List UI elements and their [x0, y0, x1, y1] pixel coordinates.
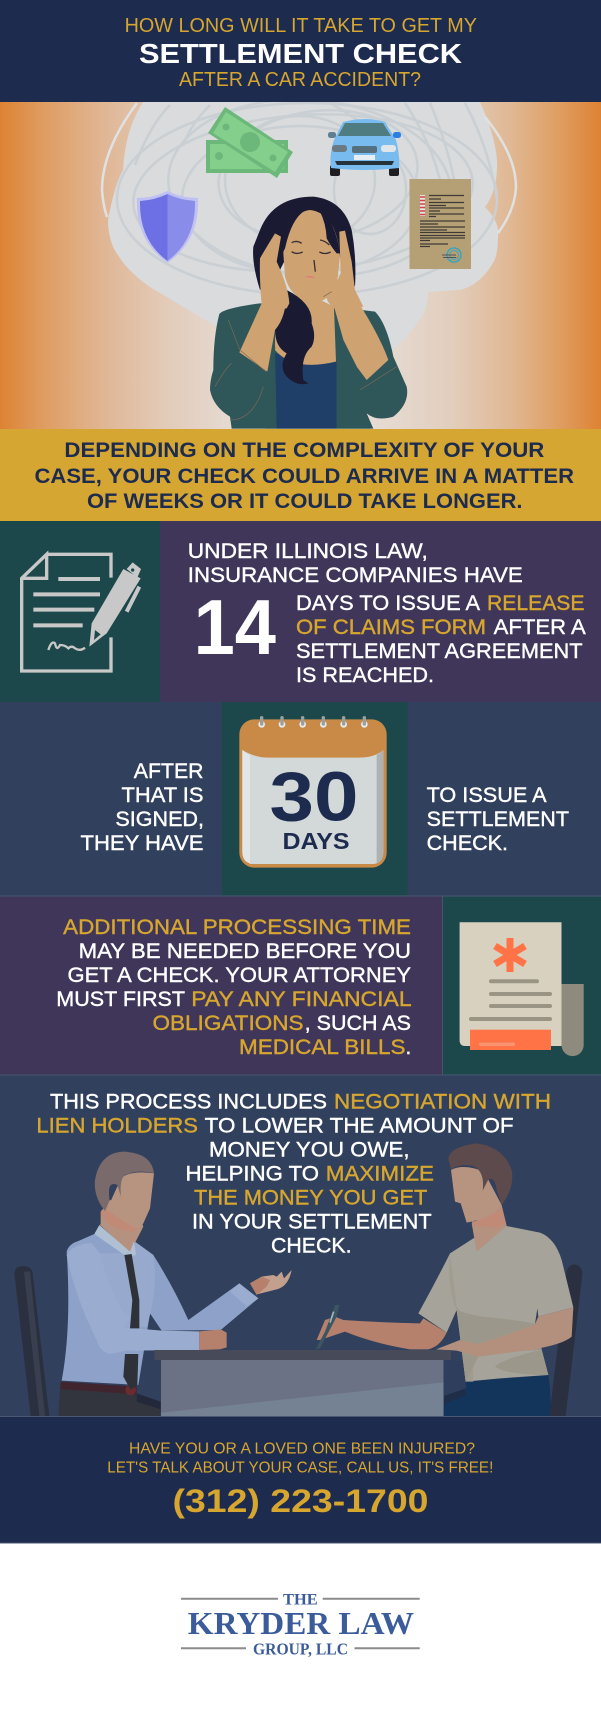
number 30: 30 [270, 758, 358, 836]
text: release of claims: IS REACHED. [296, 664, 434, 687]
text: to issue a settlement check: TO ISSUE A [427, 784, 547, 807]
panel: call to action footer [0, 1416, 601, 1543]
panel: 14 days [0, 521, 601, 702]
table [154, 1350, 451, 1416]
icon: calendar [239, 716, 387, 868]
icon: shield [137, 191, 198, 263]
text: negotiation with lien holders: MAXIMIZE [326, 1163, 434, 1186]
text: negotiation with lien holders: IN YOUR SETTLEMENT [192, 1211, 432, 1234]
summary line 1: DEPENDING ON THE COMPLEXITY OF YOUR [64, 439, 544, 462]
text: release of claims [296, 592, 586, 687]
text: release of claims: AFTER A [494, 616, 586, 639]
text: additional processing: MAY BE NEEDED BEFORE YOU [79, 940, 411, 963]
icon: blue car [328, 119, 401, 176]
logo: Kryder Law Group: GROUP, LLC [253, 1639, 348, 1658]
panel: hero illustration [0, 88, 601, 429]
call to action text: HAVE YOU OR A LOVED ONE BEEN INJURED? [129, 1440, 475, 1457]
icon: medical bill [460, 922, 584, 1056]
panel: gold summary banner [0, 429, 601, 521]
summary line 2: CASE, YOUR CHECK COULD ARRIVE IN A MATTER [34, 465, 574, 488]
icon: document [410, 179, 471, 269]
text: after that is signed [80, 760, 204, 855]
text: negotiation with lien holders [36, 1091, 551, 1258]
text: after that is signed: SIGNED, [115, 808, 204, 831]
text: negotiation with lien holders: MONEY YOU OWE, [209, 1139, 410, 1162]
panel: additional processing time [0, 896, 601, 1075]
text: to issue a settlement check: CHECK. [427, 832, 508, 855]
text: negotiation with lien holders: HELPING TO [186, 1163, 319, 1186]
title line 3: AFTER A CAR ACCIDENT? [179, 69, 421, 91]
text: additional processing: . [406, 1036, 411, 1059]
text: additional processing: ADDITIONAL PROCESSING TIME [63, 916, 411, 939]
man on right with chair [316, 1143, 582, 1416]
text: additional processing: MUST FIRST [56, 988, 185, 1011]
text: to issue a settlement check: SETTLEMENT [427, 808, 569, 831]
call to action text [107, 1440, 493, 1476]
icon: money [206, 107, 293, 178]
logo: Kryder Law Group: KRYDER LAW [188, 1605, 414, 1641]
icon: signed document and pen [22, 554, 141, 671]
text: negotiation with lien holders: CHECK. [271, 1235, 352, 1258]
man on left with chair [14, 1152, 292, 1416]
text: negotiation with lien holders: THIS PROCESS INCLUDES [50, 1091, 327, 1114]
text: negotiation with lien holders: LIEN HOLDERS [36, 1115, 198, 1138]
panel: title header [0, 0, 601, 102]
woman holding her head [210, 197, 407, 429]
panel: 30 days [0, 702, 601, 896]
text: release of claims: RELEASE [487, 592, 584, 615]
summary line 3: OF WEEKS OR IT COULD TAKE LONGER. [87, 490, 522, 513]
text: after that is signed: THAT IS [122, 784, 204, 807]
call to action text: LET'S TALK ABOUT YOUR CASE, CALL US, IT'S FREE! [107, 1459, 493, 1476]
text: negotiation with lien holders: THE MONEY YOU GET [194, 1187, 428, 1210]
text: release of claims: SETTLEMENT AGREEMENT [296, 640, 583, 663]
text: to issue a settlement check [427, 784, 569, 855]
text: after that is signed: AFTER [134, 760, 204, 783]
panel: negotiation [0, 1075, 601, 1417]
text: under Illinois law [188, 540, 523, 587]
text: additional processing: MEDICAL BILLS [239, 1036, 406, 1059]
thought cloud with scribbles [102, 88, 516, 350]
text: additional processing: , SUCH AS [305, 1012, 411, 1035]
text: negotiation with lien holders: NEGOTIATION WITH [334, 1091, 551, 1114]
text: additional processing [56, 916, 412, 1059]
text: release of claims: OF CLAIMS FORM [296, 616, 486, 639]
text: additional processing: GET A CHECK. YOUR ATTORNEY [68, 964, 411, 987]
text: under Illinois law: UNDER ILLINOIS LAW, [188, 540, 428, 563]
logo: Kryder Law Group [181, 1592, 420, 1658]
big number 14: 14 [194, 583, 276, 671]
label days: DAYS [282, 828, 350, 854]
text: release of claims: DAYS TO ISSUE A [296, 592, 480, 615]
text: after that is signed: THEY HAVE [80, 832, 204, 855]
text: under Illinois law: INSURANCE COMPANIES HAVE [188, 564, 523, 587]
text: additional processing: PAY ANY FINANCIAL [191, 988, 412, 1011]
text: additional processing: OBLIGATIONS [152, 1012, 304, 1035]
logo: Kryder Law Group: THE [283, 1592, 318, 1609]
text: negotiation with lien holders: TO LOWER THE AMOUNT OF [205, 1115, 514, 1138]
title line 1: HOW LONG WILL IT TAKE TO GET MY [125, 15, 477, 37]
title line 2: SETTLEMENT CHECK [139, 38, 462, 69]
phone number: (312) 223-1700 [172, 1483, 428, 1519]
